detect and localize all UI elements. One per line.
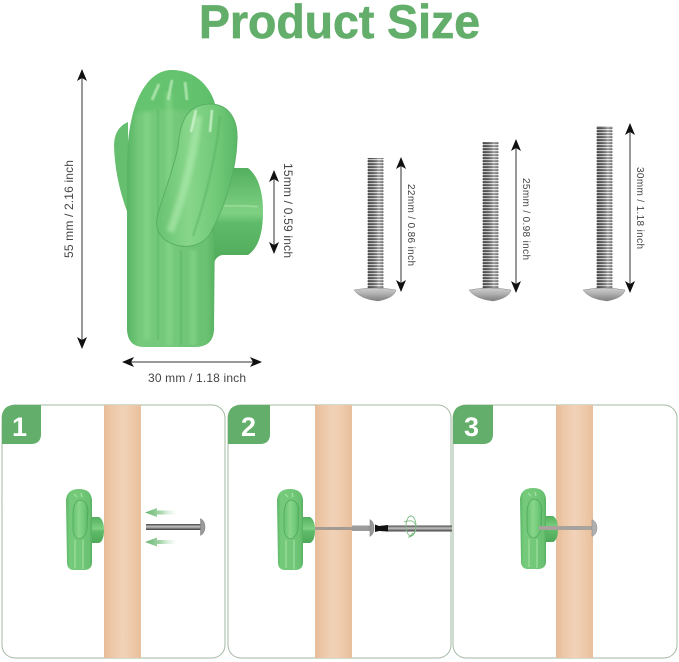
green arrows [145,508,176,546]
dimension: height 55 mm: 55 mm / 2.16 inch [62,160,76,258]
cactus knob [277,489,315,570]
dimension: stem 15 mm [274,163,295,258]
screwdriver [375,524,452,532]
screw: 25 mm [469,140,531,301]
dimension: width 30 mm [123,362,261,385]
screw: 30 mm: 30mm / 1.18 inch [634,167,645,249]
knob stem [205,168,263,268]
step badge [453,405,493,444]
step badge [228,405,270,444]
cactus knob [66,489,104,570]
screw [315,520,374,536]
dimension: width 30 mm: 30 mm / 1.18 inch [148,371,246,385]
cactus body [127,70,215,347]
dimension: stem 15 mm: 15mm / 0.59 inch [281,163,295,258]
panel: step 3 [453,405,677,658]
step badge: 1 [12,412,27,442]
step badge [2,405,41,444]
screw: 25 mm: 25mm / 0.98 inch [520,178,531,260]
right arm [157,104,237,246]
installed screw [539,520,597,536]
panel: step 1 [2,405,225,658]
product: large cactus knob [114,60,263,347]
screw [146,518,205,536]
wood board [104,405,141,658]
wood board [315,405,352,658]
rotation arrow [404,516,416,537]
screw: 22 mm: 22mm / 0.86 inch [405,184,416,266]
wood board [556,405,593,658]
left arm [114,122,128,214]
panel: step 2 [228,405,452,658]
step badge: 2 [241,412,256,442]
cactus knob [520,488,558,569]
screw: 22 mm [354,158,416,301]
screw: 30 mm [583,124,645,301]
step badge: 3 [464,412,479,442]
